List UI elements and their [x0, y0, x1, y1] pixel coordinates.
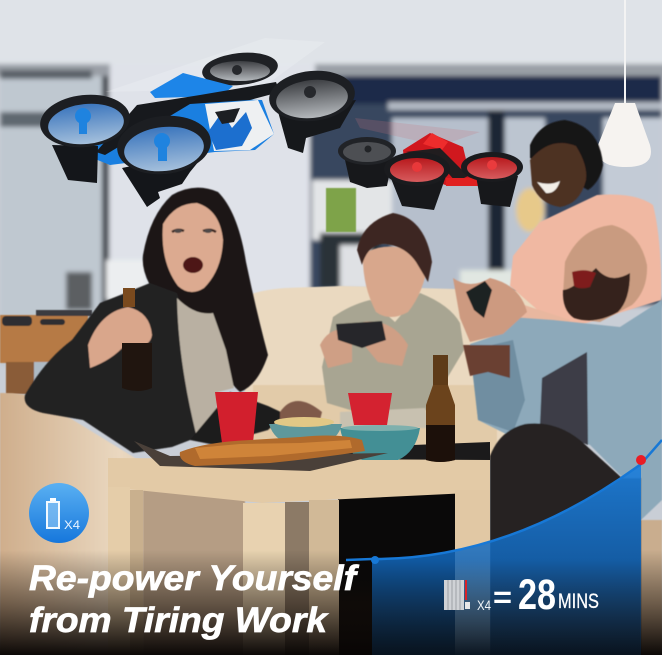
person: man cheering [453, 225, 662, 655]
bottom shade gradient [0, 550, 662, 655]
blazer [25, 283, 198, 453]
beard [563, 268, 630, 320]
dark sleeve right arm [190, 392, 285, 445]
runtime label: X4 [477, 597, 491, 613]
canopy [150, 73, 233, 98]
head [563, 225, 647, 322]
rear rotor [201, 49, 279, 89]
sweater [322, 293, 464, 416]
face [363, 247, 428, 317]
hair [357, 213, 432, 282]
headline [29, 559, 360, 640]
person: woman with controller [320, 213, 464, 428]
runtime label: MINS [558, 590, 599, 613]
left rotor [38, 90, 132, 183]
dark area under table [285, 442, 490, 655]
black band [96, 82, 280, 155]
icon: battery [47, 498, 59, 528]
blue drone [38, 38, 357, 207]
denim jacket [470, 300, 662, 520]
body [80, 98, 274, 165]
left rotor [338, 137, 396, 188]
hair [143, 188, 268, 392]
beer bottle held by woman [122, 288, 152, 391]
runtime label: = [493, 581, 512, 614]
red drone [338, 118, 523, 210]
bowls [269, 417, 420, 460]
face [530, 143, 586, 207]
front rotor [384, 152, 450, 210]
table [108, 458, 490, 655]
blue runtime chart [346, 440, 662, 655]
green book on shelf [326, 188, 356, 232]
person: woman with bottle [25, 188, 322, 453]
headline: from Tiring Work [29, 601, 329, 640]
runtime label: 28 [518, 571, 556, 619]
hands [320, 329, 352, 368]
hair [530, 120, 603, 190]
hands and joystick [453, 278, 527, 342]
sofa [0, 286, 662, 655]
battery badge [29, 483, 89, 543]
battery badge: X4 [64, 518, 80, 532]
trousers [490, 423, 641, 655]
person: woman in pink [509, 120, 661, 355]
right rotor [267, 67, 357, 153]
hand on table [280, 401, 322, 420]
icon: battery pack [444, 580, 470, 610]
t-shirt [540, 352, 588, 445]
runtime label [444, 571, 599, 619]
arm hands under sleeve [463, 345, 510, 378]
motion trail [105, 38, 325, 92]
front rotor [114, 111, 214, 207]
foosball table [0, 310, 94, 394]
face [163, 203, 223, 292]
beer bottle on table [426, 355, 455, 462]
blouse [177, 298, 234, 434]
pendant lamp [598, 0, 651, 167]
headline: Re-power Yourself [29, 559, 360, 598]
hand on bottle [88, 307, 152, 368]
body [403, 133, 472, 186]
pizza on tray [134, 436, 388, 471]
game controller [336, 321, 386, 348]
red cups [215, 392, 392, 443]
right rotor [461, 152, 523, 207]
